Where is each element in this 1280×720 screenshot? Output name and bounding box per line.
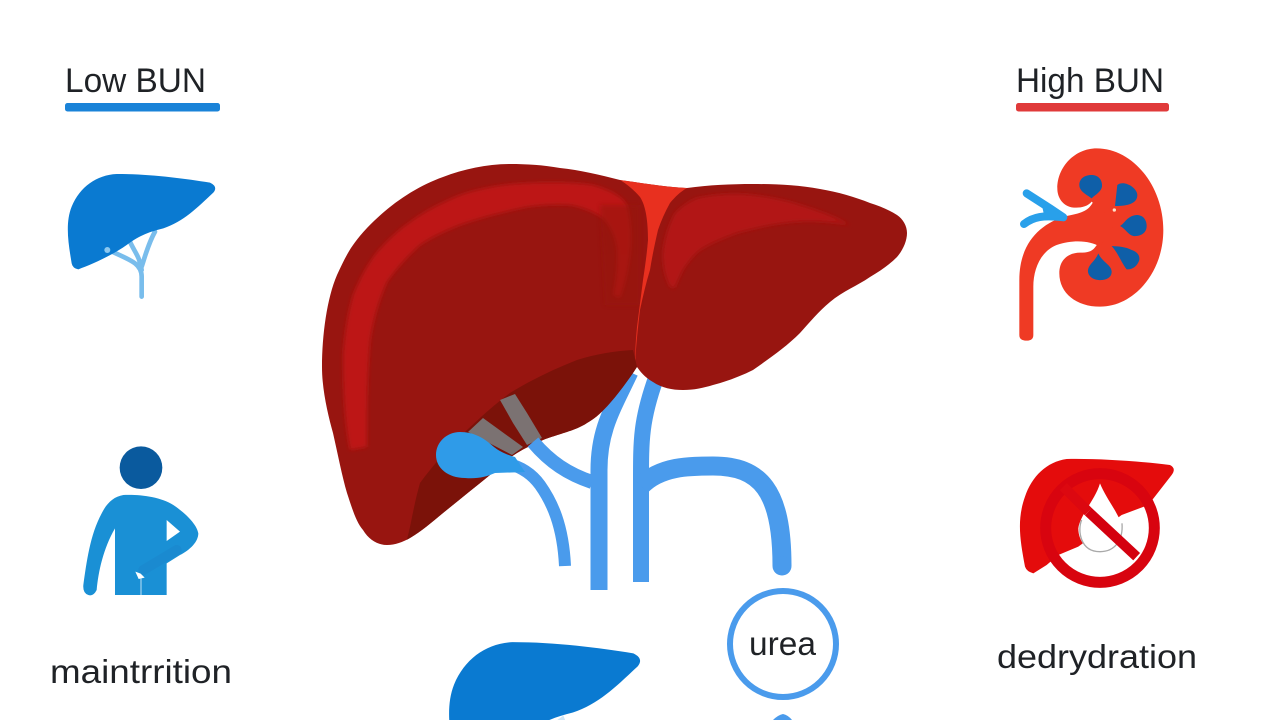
heading: Low BUN: Low BUN [65,62,206,100]
urea circle [730,591,836,697]
urea circle: urea [749,625,817,662]
bile ducts and gall bladder over liver [436,394,592,566]
icon: dehydrated liver with prohibition sign [1020,459,1174,582]
heading: High BUN: High BUN [1016,62,1164,100]
icon: kidney [1019,148,1163,341]
icon: malnourished person [83,446,198,595]
label: dedrydration: dedrydration [997,638,1197,675]
central liver, large red organ [322,164,907,548]
label: maintrrition: maintrrition [50,653,232,690]
bottom blue liver [449,642,640,720]
small blue drop below urea [773,714,792,720]
icon: blue liver, low BUN [68,174,215,297]
vessels behind the liver [599,372,792,590]
